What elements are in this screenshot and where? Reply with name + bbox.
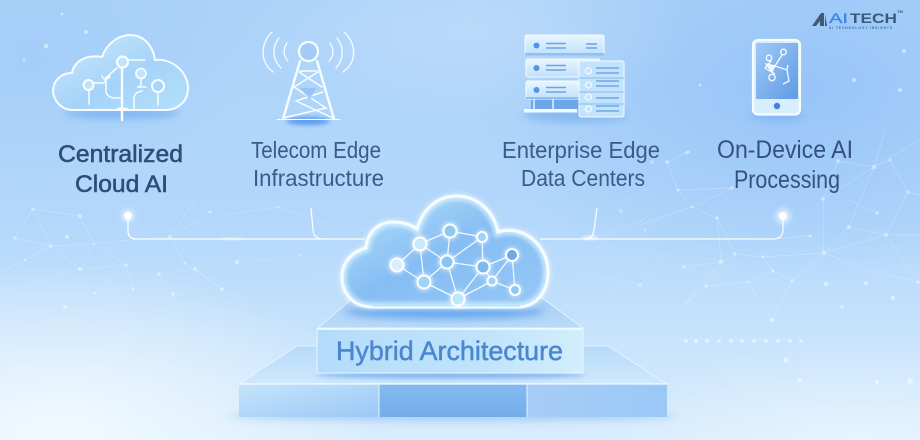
label: telecom edge infrastructure: Telecom Edge	[251, 137, 381, 163]
label: centralized cloud AI: Cloud AI	[75, 171, 168, 198]
cloud network edges	[397, 231, 515, 299]
logo: TM	[897, 9, 903, 14]
lower platform	[228, 346, 678, 421]
label: centralized cloud AI	[58, 141, 183, 198]
central cloud network	[342, 196, 548, 308]
icon: enterprise data centre servers	[523, 35, 627, 122]
label: enterprise edge data centers: Data Centers	[521, 165, 645, 191]
upper platform	[315, 298, 585, 379]
logo	[812, 9, 903, 30]
icon: smartphone	[749, 40, 805, 121]
logo: AI TECHNOLOGY INSIGHTS	[829, 26, 893, 30]
label: on-device AI processing: On-Device AI	[717, 136, 853, 164]
background network: right	[640, 49, 920, 384]
cloud network nodes	[390, 224, 520, 306]
logo: TECH	[850, 10, 897, 26]
logo: AI	[829, 11, 848, 26]
cloud node glow	[388, 222, 522, 308]
label: telecom edge infrastructure: Infrastructure	[253, 165, 384, 191]
side panel	[579, 61, 624, 117]
label: on-device AI processing	[717, 136, 853, 194]
label: centralized cloud AI: Centralized	[58, 141, 183, 168]
background network: left	[0, 13, 239, 309]
icon: telecom tower	[263, 32, 354, 125]
label: telecom edge infrastructure	[251, 137, 384, 191]
label: on-device AI processing: Processing	[734, 166, 840, 194]
label: enterprise edge data centers	[502, 137, 660, 191]
connector lines	[121, 208, 791, 240]
label: enterprise edge data centers: Enterprise Edge	[502, 137, 660, 163]
platform label: Hybrid Architecture	[336, 336, 563, 366]
icon: centralized cloud AI	[53, 35, 188, 120]
background network: centre	[222, 152, 687, 300]
server racks	[524, 35, 604, 112]
